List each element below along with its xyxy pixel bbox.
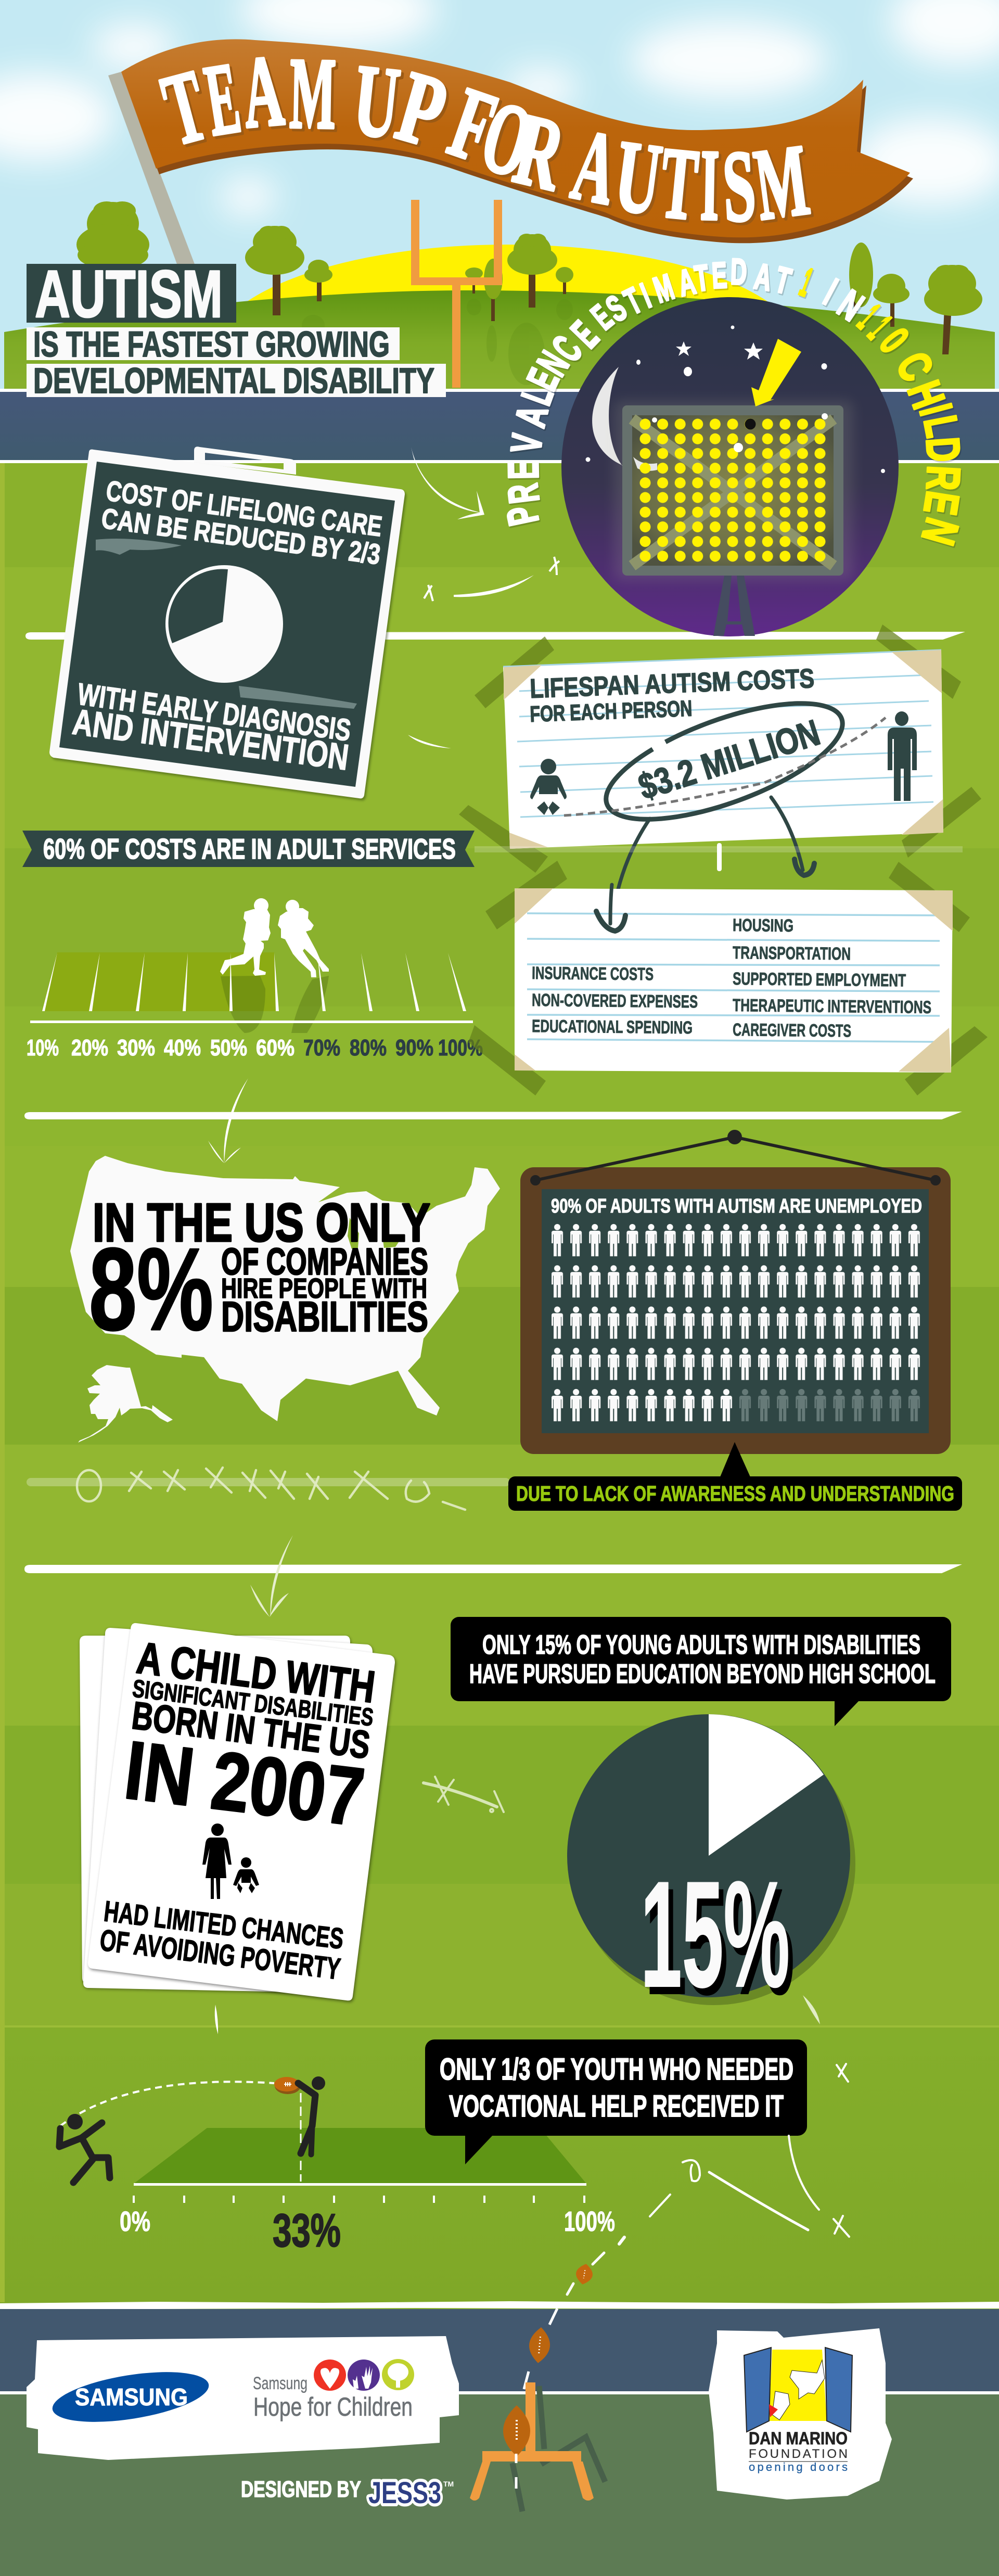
field background bands <box>0 462 999 2303</box>
play marks right <box>567 2064 849 2294</box>
arc title: E <box>711 255 728 296</box>
clipboard heading <box>99 474 384 570</box>
marino logo panel <box>709 2328 892 2500</box>
note paper <box>503 650 943 849</box>
samsung small: Samsung <box>253 2374 308 2393</box>
arc title: P <box>497 502 548 529</box>
sky background <box>0 0 999 396</box>
card left list: NON-COVERED EXPENSES <box>532 990 698 1012</box>
dashed drop line <box>300 2093 302 2182</box>
icon: tree <box>382 2359 414 2390</box>
autism heading <box>27 257 446 401</box>
clipboard heading: COST OF LIFELONG CARE <box>104 474 384 543</box>
play mark to pie <box>424 1777 504 1812</box>
sun <box>211 245 804 463</box>
hill <box>4 290 995 396</box>
percent axis labels: 100% <box>438 1035 483 1061</box>
white line <box>0 2391 999 2394</box>
yellow arrow <box>751 339 801 406</box>
play marks row <box>77 1468 465 1510</box>
arc title: 0 <box>870 320 918 362</box>
jess3 logo: JESS3 <box>368 2476 441 2510</box>
prevalence circle <box>497 251 970 636</box>
card right list: CAREGIVER COSTS <box>733 1020 851 1041</box>
arc title: R <box>916 465 970 492</box>
arrow right to costs <box>771 797 814 875</box>
goal shadow <box>513 2386 605 2511</box>
bottom goal section <box>0 2263 999 2576</box>
banner title: T <box>152 49 217 167</box>
clipboard clip <box>194 447 296 475</box>
scoreboard panel <box>632 415 834 566</box>
arc title: C <box>543 328 592 370</box>
tree 5 <box>484 259 503 321</box>
percent axis labels: 30% <box>117 1035 155 1061</box>
play marks <box>424 557 559 601</box>
lifespan costs note <box>459 624 981 931</box>
axis labels: 100% <box>564 2206 615 2237</box>
arc title: 1 <box>859 308 900 348</box>
back sheet <box>80 1636 350 1983</box>
banner title: T <box>656 126 702 241</box>
clipboard face <box>59 462 395 787</box>
arc title: 1 <box>795 260 818 305</box>
dark field <box>0 2394 999 2576</box>
fastest growing label: IS THE FASTEST GROWING <box>33 324 390 364</box>
dash below ball <box>515 2454 517 2463</box>
trademark: TM <box>443 2480 454 2488</box>
faint yard line <box>475 846 963 852</box>
clouds <box>0 0 999 216</box>
percent axis labels: 50% <box>210 1035 247 1061</box>
card left list <box>532 963 698 1038</box>
arc title: M <box>649 267 679 311</box>
percent axis labels <box>27 1035 483 1061</box>
arc title: T <box>618 280 648 323</box>
vocational callout: VOCATIONAL HELP RECEIVED IT <box>449 2089 784 2123</box>
highlighted dot <box>745 418 755 430</box>
banner title: P <box>386 49 458 170</box>
sheet footer: HAD LIMITED CHANCES <box>103 1894 345 1955</box>
arc title: S <box>599 288 633 330</box>
front sheet <box>88 1623 395 2000</box>
dashes over band <box>516 2309 557 2489</box>
sheet footer <box>98 1894 345 1986</box>
white lines of top band <box>0 389 999 463</box>
football three <box>503 2405 530 2456</box>
goal post near <box>470 2382 594 2501</box>
rule <box>749 2461 848 2462</box>
arc title: I <box>817 270 844 313</box>
arc title: E <box>518 362 568 397</box>
pie body <box>567 1714 850 1997</box>
clipboard footer <box>70 677 353 778</box>
disabilities: DISABILITIES <box>221 1293 428 1341</box>
opening doors: opening doors <box>749 2460 848 2473</box>
samsung logo panel <box>27 2336 459 2460</box>
arc title: D <box>916 436 970 464</box>
education callout <box>451 1617 951 1726</box>
icon: man <box>888 711 917 801</box>
clipboard <box>49 447 405 798</box>
tree 6 <box>507 234 557 308</box>
sixty percent ribbon <box>22 831 475 867</box>
banner title: O <box>470 79 544 199</box>
card left list: INSURANCE COSTS <box>532 963 654 984</box>
pie shadow <box>572 1722 855 2005</box>
tape under card <box>468 861 988 1095</box>
note heading <box>529 664 815 727</box>
arc title: D <box>730 251 748 292</box>
middle sheet <box>83 1628 373 1993</box>
banner title: R <box>505 93 575 212</box>
map mainland <box>70 1156 500 1421</box>
eight percent: 8% <box>89 1223 213 1355</box>
board face <box>542 1189 929 1433</box>
axis labels: 0% <box>120 2206 150 2237</box>
catch diagram <box>59 2076 615 2257</box>
tree 1 <box>76 201 149 271</box>
flag pole <box>108 72 195 265</box>
of companies: OF COMPANIES <box>221 1241 428 1283</box>
tree 3 <box>304 260 332 301</box>
right door <box>825 2348 852 2432</box>
arc title: L <box>914 412 968 441</box>
sheet heading: BORN IN THE US <box>130 1693 373 1767</box>
trees <box>76 200 982 388</box>
arc title: T <box>771 260 795 302</box>
map lakes <box>348 1218 402 1249</box>
icon: baby <box>530 759 567 815</box>
in the us only: IN THE US ONLY <box>93 1193 430 1253</box>
player two <box>278 900 329 977</box>
door opening <box>769 2350 827 2421</box>
banner title: I <box>699 129 720 241</box>
thirty three percent: 33% <box>273 2205 341 2257</box>
cost items card <box>468 861 988 1095</box>
card right list: HOUSING <box>733 915 793 936</box>
banner title: M <box>289 37 337 150</box>
percent axis labels: 40% <box>164 1035 201 1061</box>
three point two million: $3.2 MILLION <box>634 712 825 807</box>
chalkboard <box>520 1131 951 1454</box>
football outline <box>593 680 856 843</box>
sheet heading: SIGNIFICANT DISABILITIES <box>131 1675 375 1732</box>
baseline <box>134 2183 586 2186</box>
pie slice <box>709 1714 824 1856</box>
banner body <box>121 39 910 237</box>
arrow to sheets <box>250 1535 293 1617</box>
left door <box>744 2348 771 2432</box>
helping hands <box>769 2360 825 2420</box>
arc title: E <box>584 298 620 338</box>
arc title: E <box>914 488 969 518</box>
football one <box>574 2263 594 2286</box>
hope for children: Hope for Children <box>253 2392 413 2421</box>
fifteen percent pie <box>567 1714 855 2019</box>
arc title: C <box>886 344 943 389</box>
goal post far <box>411 200 502 388</box>
clipboard footer: AND INTERVENTION <box>70 702 351 778</box>
scoreboard frame <box>622 405 843 576</box>
tape under note <box>459 624 981 873</box>
player one <box>220 898 271 976</box>
yard tick <box>717 843 722 871</box>
blue band top <box>0 391 999 462</box>
arrow to map <box>208 1078 248 1163</box>
fifteen percent pie: 15% <box>641 1850 790 2019</box>
designer credit: DESIGNED BY <box>241 2477 361 2502</box>
note heading: LIFESPAN AUTISM COSTS <box>529 664 815 704</box>
banner title: U <box>609 119 668 236</box>
designer credit <box>241 2476 454 2510</box>
banner title: F <box>437 66 509 184</box>
banner title: A <box>238 33 288 149</box>
small play strokes <box>215 1995 820 2034</box>
faint play line <box>27 1478 510 1486</box>
developmental disability label: DEVELOPMENTAL DISABILITY <box>33 361 434 401</box>
hire people with: HIRE PEOPLE WITH <box>221 1273 427 1304</box>
board hanger <box>532 1131 939 1184</box>
clipboard footer: WITH EARLY DIAGNOSIS <box>75 677 353 748</box>
tree 2 <box>245 226 304 315</box>
sheet heading <box>120 1633 378 1843</box>
arc title: I <box>909 399 962 420</box>
title banner <box>121 33 913 244</box>
awareness callout <box>508 1442 962 1511</box>
autism block: AUTISM <box>35 257 223 331</box>
play curve small <box>408 735 451 748</box>
arc title: T <box>693 257 711 299</box>
percent axis labels: 90% <box>395 1035 433 1061</box>
clipboard board <box>49 450 405 798</box>
icon: child <box>233 1857 259 1893</box>
arc title: I <box>635 276 656 316</box>
arc title: N <box>912 513 969 551</box>
card paper <box>515 888 953 1073</box>
tree 4 <box>465 267 483 294</box>
play arrow to circle <box>408 447 559 748</box>
percent axis labels: 80% <box>350 1035 387 1061</box>
tree 8 <box>849 243 873 312</box>
dan marino: DAN MARINO <box>749 2429 848 2449</box>
chart filled area <box>42 952 277 1011</box>
tree 7 <box>556 267 573 294</box>
foundation: FOUNDATION <box>749 2447 848 2461</box>
play curve <box>454 575 534 597</box>
map alaska <box>78 1365 173 1443</box>
player shadows <box>221 976 329 1033</box>
tree reflections <box>302 299 573 385</box>
sixty percent ribbon: 60% OF COSTS ARE IN ADULT SERVICES <box>43 833 456 865</box>
vocational callout: ONLY 1/3 OF YOUTH WHO NEEDED <box>440 2052 793 2086</box>
note heading: FOR EACH PERSON <box>530 696 693 727</box>
samsung oval <box>49 2363 212 2431</box>
axis labels <box>120 2206 615 2237</box>
us map <box>70 1156 500 1443</box>
icon: hands <box>348 2360 380 2391</box>
thrower figure <box>59 2114 110 2183</box>
arc title: N <box>528 343 579 384</box>
sheet heading: IN 2007 <box>120 1724 369 1843</box>
percent axis labels: 10% <box>27 1035 59 1061</box>
moon tail <box>633 457 657 471</box>
clipboard heading: CAN BE REDUCED BY 2/3 <box>99 502 382 570</box>
banner title: E <box>198 41 247 157</box>
scoreboard glow <box>614 401 853 580</box>
arc title: N <box>830 282 871 330</box>
card right list: TRANSPORTATION <box>733 943 851 964</box>
arc title: V <box>502 431 551 455</box>
tree 10 <box>924 265 982 354</box>
field trapezoid <box>134 2128 586 2184</box>
tree 9 <box>873 274 910 327</box>
moon <box>592 367 624 468</box>
banner title <box>152 33 815 244</box>
yard lines <box>42 953 466 1011</box>
note rules <box>503 650 941 817</box>
sheet heading: A CHILD WITH <box>134 1633 378 1713</box>
clipboard smudges <box>96 539 357 709</box>
arc title: 1 <box>849 296 888 337</box>
icon: football caught <box>274 2077 301 2094</box>
ticks <box>133 2196 585 2203</box>
tape corners <box>504 650 943 849</box>
arc title: R <box>499 481 548 506</box>
tape corners <box>515 888 953 1073</box>
clipboard pie chart <box>165 565 283 683</box>
arc title: E <box>562 312 607 356</box>
sheet footer: OF AVOIDING POVERTY <box>98 1923 342 1986</box>
card right list: SUPPORTED EMPLOYMENT <box>733 969 906 990</box>
yard chart <box>27 898 483 1061</box>
arc title: H <box>898 374 955 415</box>
arc title: E <box>499 461 547 480</box>
banner shadow <box>124 45 913 243</box>
child poverty sheets <box>80 1623 395 2000</box>
banner title: S <box>720 130 758 244</box>
arc title: A <box>506 401 557 431</box>
percent axis labels: 70% <box>303 1035 340 1061</box>
board frame <box>520 1167 951 1454</box>
scoreboard dots <box>636 417 829 564</box>
catcher figure <box>298 2076 325 2154</box>
dashed growth line <box>564 718 886 815</box>
field line 3 <box>24 1564 962 1573</box>
chart baseline <box>30 1021 473 1023</box>
icon: heart <box>314 2360 346 2391</box>
small white dots <box>652 413 828 452</box>
card rules <box>527 913 940 1042</box>
vocational callout <box>425 2039 807 2164</box>
arc title <box>497 251 970 551</box>
field line 2 <box>24 1112 962 1119</box>
card left list: EDUCATIONAL SPENDING <box>532 1016 693 1038</box>
samsung wordmark: SAMSUNG <box>75 2383 188 2411</box>
percent axis labels: 60% <box>256 1035 294 1061</box>
night sky <box>561 297 899 636</box>
card right list <box>733 915 931 1041</box>
card right list: THERAPEUTIC INTERVENTIONS <box>733 996 931 1017</box>
field line 1 <box>25 632 965 640</box>
percent axis labels: 20% <box>71 1035 108 1061</box>
banner title: A <box>565 109 625 226</box>
top white line <box>0 2301 999 2309</box>
arc title: L <box>513 380 562 411</box>
banner title: M <box>749 123 815 241</box>
stars <box>586 326 885 473</box>
dashed throw line <box>60 2082 274 2126</box>
blue band <box>0 2309 999 2391</box>
arc title: A <box>675 261 699 304</box>
icon: woman <box>202 1823 232 1899</box>
scoreboard diagonals <box>632 419 834 566</box>
arrow left to costs <box>596 819 650 931</box>
scoreboard legs <box>713 576 755 636</box>
arc title: A <box>752 256 775 299</box>
banner title: U <box>349 43 404 160</box>
arrow heads over card <box>596 885 625 931</box>
people grid <box>551 1224 927 1422</box>
football two <box>528 2326 552 2364</box>
